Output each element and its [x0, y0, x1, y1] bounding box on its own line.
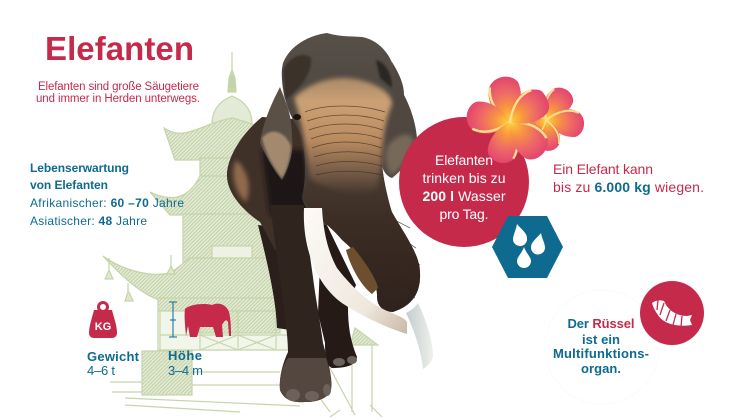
- drinking text: 200 l Wasser: [422, 188, 506, 204]
- intro text: [36, 81, 200, 105]
- weight label: Gewicht: [87, 349, 140, 364]
- height label: Höhe: [168, 348, 202, 363]
- front leg: [270, 205, 331, 402]
- flower left: [464, 74, 554, 167]
- left tusk: [304, 208, 407, 334]
- pagoda top roof: [164, 118, 300, 160]
- inner trunk lip: [346, 247, 378, 294]
- life expectancy text: [30, 161, 184, 228]
- trunk text: ist ein: [582, 332, 620, 347]
- trunk: [302, 164, 420, 312]
- front foot: [280, 358, 331, 402]
- pagoda large roof: [103, 256, 300, 300]
- trunk text: Der Rüssel: [568, 316, 634, 331]
- icon: weight: [89, 302, 117, 338]
- life expectancy text: Asiatischer: 48 Jahre: [30, 214, 147, 228]
- tan forehead and upper trunk: [294, 78, 392, 192]
- weight label: 4–6 t: [87, 363, 115, 378]
- icon: water hexagon: [492, 216, 563, 278]
- title: Elefanten: [45, 30, 194, 67]
- weight statement: Ein Elefant kann: [553, 161, 653, 177]
- eye: [293, 114, 301, 120]
- head: [282, 33, 395, 225]
- icon: elephant silhouette: [185, 304, 231, 337]
- elephant: [227, 33, 433, 402]
- plumeria flowers: [464, 74, 586, 167]
- icon: height bar: [169, 302, 177, 337]
- drinking text: trinken bis zu: [422, 170, 506, 186]
- icon: weight: KG: [95, 321, 111, 333]
- weight statement: [553, 161, 704, 195]
- life expectancy text: Lebenserwartung: [30, 161, 129, 175]
- right tusk: [406, 303, 433, 369]
- drinking text: [422, 152, 506, 222]
- drinking text: pro Tag.: [440, 206, 488, 222]
- trunk text: organ.: [581, 361, 621, 376]
- far rear leg: [258, 225, 300, 330]
- body and back ear: [227, 117, 325, 250]
- pagoda base: [142, 351, 192, 395]
- height label: 3–4 m: [168, 363, 203, 378]
- right ear: [381, 62, 417, 178]
- weight statement: bis zu 6.000 kg wiegen.: [553, 179, 704, 195]
- toenails: [286, 356, 357, 401]
- trunk wrinkles: [305, 106, 420, 298]
- pagoda middle storey: [200, 158, 266, 202]
- intro text: und immer in Herden unterwegs.: [36, 93, 200, 105]
- trunk text: Multifunktions-: [553, 346, 649, 361]
- pagoda lower storey: [183, 214, 273, 264]
- drinking text: Elefanten: [435, 152, 493, 168]
- pagoda ground floor: [158, 300, 300, 350]
- intro text: Elefanten sind große Säugetiere: [38, 81, 199, 93]
- faint dotted circle: [545, 290, 659, 404]
- pagoda spire: [228, 52, 236, 92]
- weight label: [87, 349, 140, 378]
- left ear flap: [260, 87, 293, 180]
- pagoda middle roof: [150, 176, 290, 215]
- eye sockets: [283, 55, 311, 100]
- life expectancy text: Afrikanischer: 60 –70 Jahre: [30, 196, 184, 210]
- pagoda illustration: [103, 52, 382, 417]
- right pavilion: [300, 345, 382, 417]
- drinking circle: [399, 117, 529, 247]
- pagoda hanging bells: [105, 255, 175, 301]
- trunk text: [553, 316, 649, 376]
- flower right: [516, 82, 586, 152]
- pagoda dome: [212, 96, 252, 124]
- life expectancy text: von Elefanten: [30, 178, 108, 192]
- height label: [168, 348, 203, 378]
- trunk circle icon: [640, 281, 704, 345]
- rear leg: [318, 215, 357, 368]
